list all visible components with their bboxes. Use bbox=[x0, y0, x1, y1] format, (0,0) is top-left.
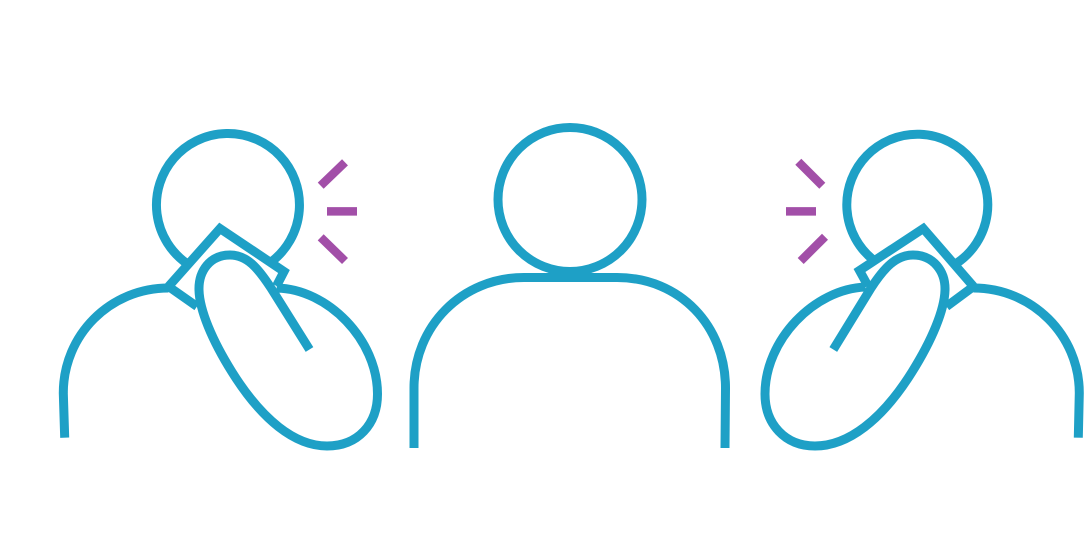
icon: left mask bbox=[168, 228, 284, 306]
icon: right cough marks bbox=[786, 162, 825, 261]
icon: left cough marks bbox=[321, 162, 357, 261]
icon: left body bbox=[63, 288, 168, 438]
figure: right coughing person bbox=[765, 134, 1079, 446]
icon: right mask bbox=[860, 228, 974, 306]
icon: centre head bbox=[498, 128, 642, 272]
icon: centre body bbox=[414, 278, 726, 448]
figure: centre person bbox=[414, 128, 726, 448]
icon: left raised arm and hand bbox=[199, 255, 378, 446]
figure: left coughing person bbox=[63, 133, 378, 446]
icon: right body bbox=[974, 288, 1079, 438]
icon: left head bbox=[156, 133, 299, 264]
icon: right raised arm and hand bbox=[765, 255, 945, 446]
icon: right head bbox=[847, 134, 988, 263]
